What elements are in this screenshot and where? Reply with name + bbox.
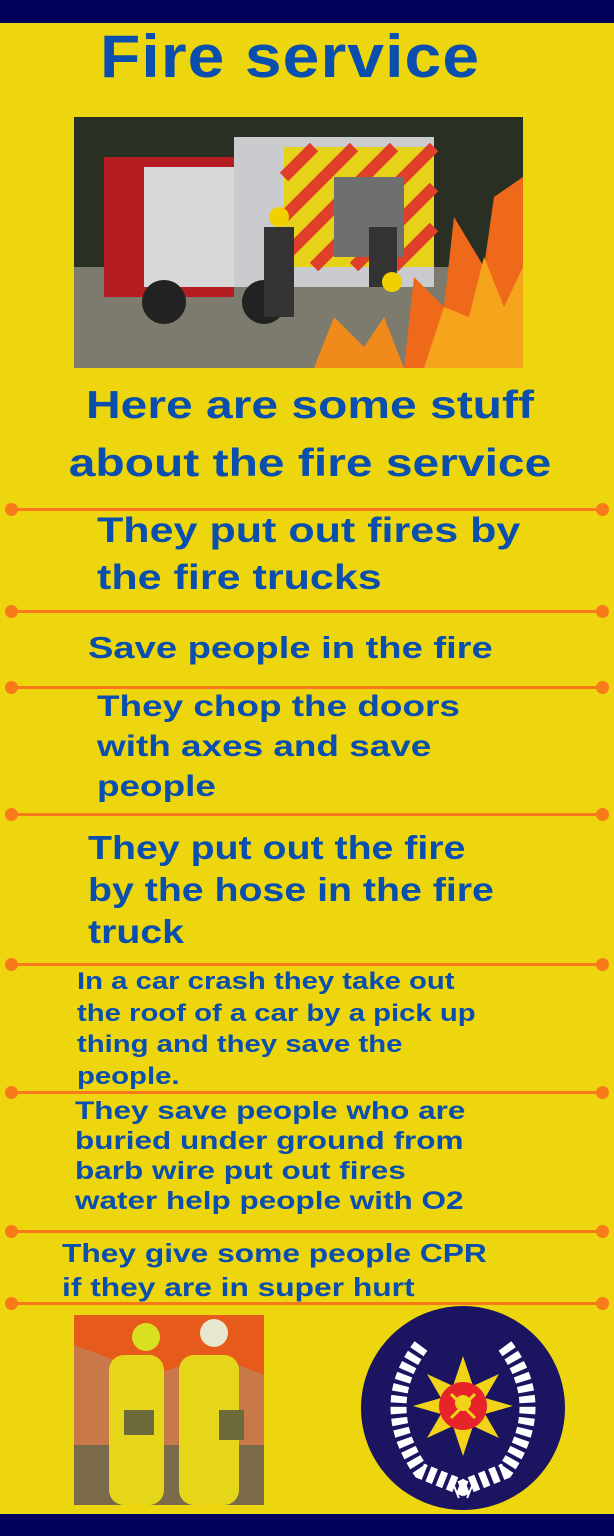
fact 5: In a car crash they take out (77, 968, 455, 995)
fact 3 (96, 690, 460, 803)
fact 6: water help people with O2 (75, 1187, 464, 1215)
fact 3: They chop the doors (97, 690, 460, 723)
bottom bar (0, 1514, 614, 1536)
fact 7: They give some people CPR (62, 1238, 487, 1268)
dividers (12, 508, 602, 511)
fact 3: people (97, 770, 216, 803)
intro heading: about the fire service (69, 442, 551, 485)
intro heading (69, 384, 551, 485)
fact 6: They save people who are (75, 1097, 465, 1125)
fact 1: They put out fires by (97, 511, 520, 550)
fact 1 (97, 511, 520, 597)
fact 7: if they are in super hurt (62, 1272, 415, 1302)
fact 5: thing and they save the (77, 1031, 402, 1058)
fact 5: the roof of a car by a pick up (77, 1000, 476, 1026)
fact 6: buried under ground from (75, 1127, 463, 1155)
fact 3: with axes and save (97, 730, 431, 763)
fact 4 (88, 829, 494, 950)
fact 2: Save people in the fire (88, 630, 493, 665)
fact 6: barb wire put out fires (75, 1157, 406, 1185)
fact 5: people. (77, 1062, 179, 1090)
fact 4: truck (88, 913, 184, 950)
top bar (0, 0, 614, 23)
photo: fire truck (74, 117, 523, 368)
fact 4: They put out the fire (88, 829, 465, 866)
title: Fire service (100, 23, 480, 90)
fact 4: by the hose in the fire (88, 871, 494, 908)
fact 5 (77, 968, 476, 1090)
photo: firefighters (74, 1315, 264, 1505)
intro heading: Here are some stuff (86, 384, 534, 427)
fact 1: the fire trucks (97, 558, 382, 597)
fact 7 (62, 1238, 487, 1302)
logo: fire service emblem (361, 1306, 565, 1510)
fact 6 (74, 1097, 465, 1215)
